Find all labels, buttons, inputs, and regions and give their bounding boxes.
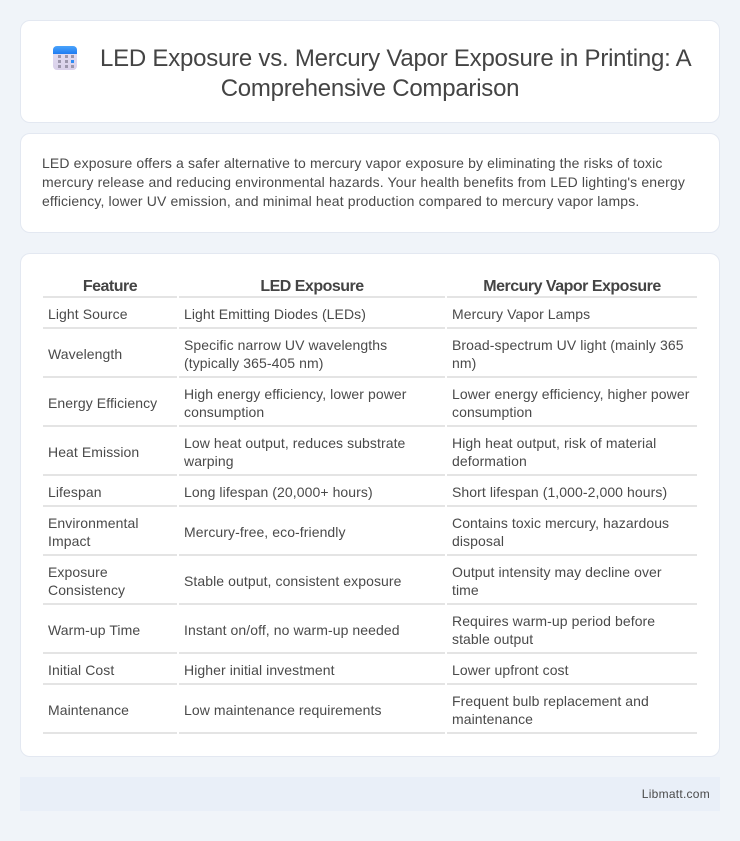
text: Wavelength	[48, 346, 122, 362]
intro text: efficiency, lower UV emission, and minimal heat production compared to mercury vapor lamps.	[42, 193, 639, 209]
text: Long lifespan (20,000+ hours)	[184, 484, 373, 500]
text: LED Exposure	[260, 278, 364, 295]
text: Environmental	[48, 515, 139, 531]
title card	[20, 20, 720, 123]
text: Low maintenance requirements	[184, 702, 382, 718]
text: Maintenance	[48, 702, 129, 718]
text: Lower energy efficiency, higher power	[452, 386, 689, 402]
text: Light Source	[48, 306, 128, 322]
text: Mercury Vapor Lamps	[452, 306, 590, 322]
text: Mercury-free, eco-friendly	[184, 524, 346, 540]
comparison table panel	[20, 253, 720, 757]
text: (typically 365-405 nm)	[184, 355, 323, 371]
intro text panel	[20, 133, 720, 233]
text: Lower upfront cost	[452, 662, 569, 678]
text: Requires warm-up period before	[452, 613, 655, 629]
text: Heat Emission	[48, 444, 139, 460]
footer bar	[20, 777, 720, 811]
intro text	[42, 155, 685, 209]
text: Exposure	[48, 564, 108, 580]
text: Low heat output, reduces substrate	[184, 435, 405, 451]
text: Stable output, consistent exposure	[184, 573, 402, 589]
text: nm)	[452, 355, 476, 371]
table rows	[43, 296, 697, 734]
text: warping	[184, 453, 234, 469]
text: stable output	[452, 631, 533, 647]
footer credit: Libmatt.com	[642, 787, 710, 801]
text: Initial Cost	[48, 662, 114, 678]
intro text: LED exposure offers a safer alternative to mercury vapor exposure by eliminating the risks of toxic	[42, 155, 663, 171]
text: Broad-spectrum UV light (mainly 365	[452, 337, 684, 353]
text: Specific narrow UV wavelengths	[184, 337, 387, 353]
text: maintenance	[452, 711, 533, 727]
text: Feature	[83, 278, 137, 295]
title	[100, 45, 692, 102]
text: consumption	[184, 404, 264, 420]
intro text: mercury release and reducing environmental hazards. Your health benefits from LED lighting's energy	[42, 174, 685, 190]
text: time	[452, 582, 479, 598]
text: disposal	[452, 533, 504, 549]
title: Comprehensive Comparison	[221, 75, 519, 102]
icon: calendar	[53, 46, 77, 70]
text: Frequent bulb replacement and	[452, 693, 649, 709]
text: deformation	[452, 453, 527, 469]
text: consumption	[452, 404, 532, 420]
text: Impact	[48, 533, 90, 549]
text: High energy efficiency, lower power	[184, 386, 406, 402]
table header	[83, 278, 661, 295]
text: Mercury Vapor Exposure	[483, 278, 661, 295]
text: High heat output, risk of material	[452, 435, 656, 451]
text: Warm-up Time	[48, 622, 140, 638]
text: Output intensity may decline over	[452, 564, 662, 580]
text: Light Emitting Diodes (LEDs)	[184, 306, 366, 322]
text: Energy Efficiency	[48, 395, 157, 411]
text: Instant on/off, no warm-up needed	[184, 622, 400, 638]
text: Consistency	[48, 582, 125, 598]
title: LED Exposure vs. Mercury Vapor Exposure in Printing: A	[100, 45, 691, 72]
text: Higher initial investment	[184, 662, 335, 678]
text: Lifespan	[48, 484, 102, 500]
text: Contains toxic mercury, hazardous	[452, 515, 669, 531]
text: Short lifespan (1,000-2,000 hours)	[452, 484, 667, 500]
